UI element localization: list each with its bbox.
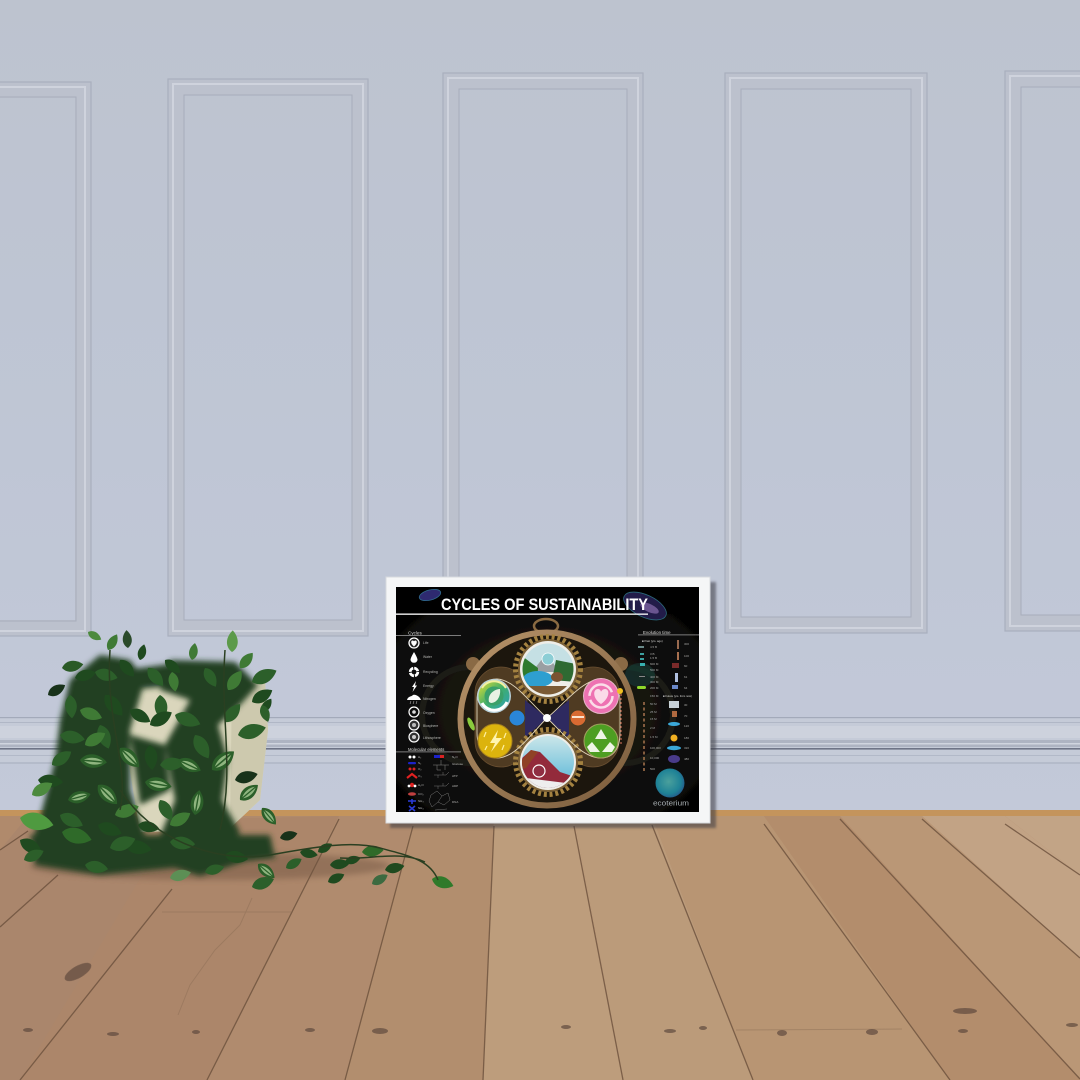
leaves: [17, 629, 455, 892]
past timeline: 50 M: [650, 702, 657, 706]
molecule list: [407, 755, 424, 811]
galaxy top right: [620, 586, 670, 626]
chemical structures: [429, 755, 463, 810]
nebula glow: [625, 663, 655, 687]
top gear with landscape: [516, 636, 580, 702]
green gecko: [466, 717, 476, 731]
molecule list: O₃: [418, 774, 422, 778]
recent and future timeline: 180: [684, 736, 689, 740]
chemical structures: N₂O: [452, 755, 458, 759]
recent and future timeline: 480: [684, 757, 689, 761]
molecule list: N₂: [418, 761, 422, 765]
wainscot rail: [0, 717, 1080, 764]
evolution heading: Evolution time: [643, 630, 671, 635]
molecule list: H₂O: [418, 783, 424, 787]
panel moulding 3: [443, 73, 643, 630]
circle: recycling: [584, 724, 618, 758]
vine stems: [109, 650, 438, 880]
past timeline: 10,000: [650, 756, 660, 760]
purple centre texture: [525, 700, 569, 738]
molecule list: H₂: [418, 755, 422, 759]
recent and future timeline: 120: [684, 724, 689, 728]
past timeline: 200 M: [650, 686, 659, 690]
past timeline: 500 M: [650, 668, 659, 672]
title underline: [396, 614, 648, 615]
recent and future timeline: 64: [684, 686, 688, 690]
panel moulding 2: [168, 79, 368, 636]
panel moulding 1: [0, 82, 91, 636]
plant shadow on floor: [30, 852, 390, 880]
legend: molecular elements: [396, 747, 463, 811]
past timeline: 15 M: [650, 717, 657, 721]
planter: [120, 680, 268, 832]
cycle: life: Life: [423, 641, 429, 645]
chemical structures: ATP: [452, 774, 458, 778]
plant: hanging foliage: [17, 629, 455, 892]
past timeline: 1.5 B: [650, 656, 657, 660]
white picture frame: [386, 577, 710, 823]
recent and future timeline: [663, 640, 692, 763]
wall background: [0, 0, 1080, 816]
chemical structures: ADP: [452, 784, 458, 788]
infinity path: [477, 679, 620, 758]
cycle: recycling: Recycling: [423, 670, 438, 674]
molecular heading: Molecular elements: [408, 747, 444, 752]
circle: energy bolt: [478, 724, 512, 758]
past timeline: ■ Past (yrs. ago): [642, 639, 663, 643]
cycle: biosphere: Biosphere: [423, 724, 438, 728]
molecule list: CO₂: [418, 792, 424, 796]
cycle atoms chain right: [620, 694, 622, 745]
small blue water circle: [509, 710, 525, 726]
cycle: energy: Energy: [423, 684, 434, 688]
past timeline: 2 M: [650, 726, 656, 730]
past timeline: 100,000: [650, 746, 661, 750]
cycle: lithosphere: Lithosphere: [423, 736, 441, 740]
galaxy top left: [418, 587, 442, 603]
bottom gear with volcano: [516, 730, 580, 794]
wall panel mouldings: [0, 71, 1080, 636]
recent and future timeline: 30: [684, 703, 688, 707]
legend: cycles: [396, 630, 461, 742]
title: CYCLES OF SUSTAINABILITY: [441, 595, 648, 614]
molecule list: NH₃: [418, 799, 424, 803]
past timeline: 4.5 B: [650, 645, 657, 649]
past timeline: 150 M: [650, 694, 659, 698]
clock outer ring: [460, 632, 634, 806]
chemical structures: DNA: [452, 800, 458, 804]
past timeline: [637, 639, 663, 772]
recent and future timeline: 100: [684, 654, 689, 658]
panel moulding 5: [1005, 71, 1080, 631]
title band: [396, 587, 699, 614]
past timeline: 400 M: [650, 675, 659, 679]
small orange earth circle: [570, 710, 586, 726]
poster: Cycles of Sustainability: [396, 586, 699, 812]
foliage dark mass: [30, 655, 275, 876]
recent and future timeline: ■ Future (yrs. from now): [663, 694, 692, 698]
poster background: [396, 587, 699, 812]
past timeline: 1.5 M: [650, 735, 658, 739]
past timeline: 300 M: [650, 680, 659, 684]
background gears: [422, 667, 673, 763]
side knob left: [466, 657, 480, 671]
recent and future timeline: 61: [684, 675, 688, 679]
side knob right: [614, 657, 628, 671]
molecule list: O₂: [418, 767, 422, 771]
frame shadow: [390, 582, 716, 828]
recent and future timeline: 320: [684, 746, 689, 750]
ecoterium logo: [653, 768, 689, 808]
skirting edge: [0, 810, 1080, 816]
recent and future timeline: 300: [684, 642, 689, 646]
panel moulding 4: [725, 73, 927, 633]
sun icon: [617, 688, 623, 694]
legend: evolution time: [637, 630, 699, 772]
chemical structures: Glucose: [452, 762, 463, 766]
plank tones: [0, 816, 1080, 1080]
molecule list: NH₄: [418, 806, 424, 810]
ecoterium logo: ecoterium: [653, 798, 689, 808]
circle: heart love: [584, 678, 618, 714]
clock inner lobes: [475, 667, 619, 767]
wooden floor: [0, 816, 1080, 1080]
past timeline: 3 B: [650, 652, 655, 656]
cycle: water: Water: [423, 655, 433, 659]
cycle: oxygen: Oxygen: [423, 711, 435, 715]
centre star: [543, 714, 551, 722]
clock loop top: [534, 619, 558, 633]
floor knots: [23, 959, 1078, 1036]
circle: growth leaf: [477, 679, 511, 713]
recent and future timeline: 70: [684, 714, 688, 718]
past timeline: 25 M: [650, 710, 657, 714]
cycle: nitrogen: Nitrogen: [423, 697, 436, 701]
cycles heading: Cycles: [408, 630, 422, 636]
past timeline: 500: [650, 767, 655, 771]
recent and future timeline: 60: [684, 664, 688, 668]
past timeline: 600 M: [650, 662, 659, 666]
